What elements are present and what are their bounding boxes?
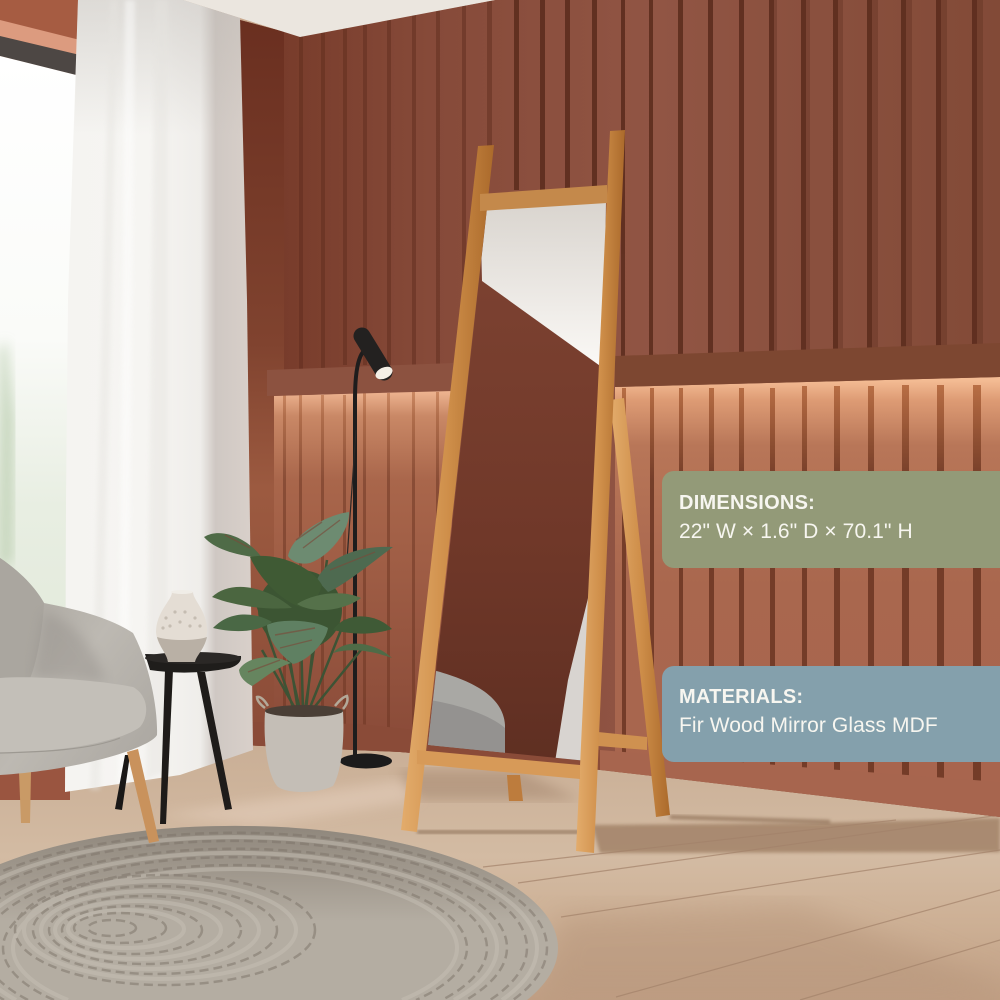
callout: materials (662, 666, 1000, 762)
lower wall lit by shelf light (274, 390, 452, 760)
upper shelf left (267, 363, 453, 396)
callout: dimensions (662, 471, 1000, 568)
reflected curtain (556, 598, 588, 760)
wall with vertical slats (240, 0, 1000, 830)
potted plant (204, 512, 393, 792)
top crossbar (480, 185, 607, 211)
upper shelf right (615, 343, 1000, 387)
ceiling (183, 0, 495, 37)
left frame leg (401, 145, 494, 832)
right frame leg (576, 130, 625, 853)
armchair (0, 558, 159, 843)
dimensions value: 22" W × 1.6" D × 70.1" H (679, 520, 913, 543)
baseboard (600, 750, 981, 784)
leaning mirror (401, 130, 670, 853)
leaves (204, 512, 393, 686)
side table with vase (115, 590, 241, 824)
leaf mass (258, 570, 342, 650)
lower slat grooves (283, 392, 439, 740)
pot (265, 711, 343, 792)
materials value: Fir Wood Mirror Glass MDF (679, 714, 938, 737)
round woven rug (0, 826, 558, 1000)
floor lamp (340, 336, 394, 768)
floor (0, 740, 1000, 1000)
reflected ceiling (482, 203, 606, 365)
vase (156, 592, 207, 662)
dimensions heading: DIMENSIONS: (679, 492, 815, 514)
rear support legs (610, 398, 670, 817)
upper left slat grooves (299, 0, 492, 370)
mirror glass (428, 201, 606, 762)
upper right slat grooves (514, 0, 977, 358)
curtain (65, 0, 253, 792)
bottom crossbar (417, 750, 580, 779)
reflected armchair (428, 670, 505, 756)
window (0, 0, 80, 800)
materials heading: MATERIALS: (679, 686, 803, 708)
